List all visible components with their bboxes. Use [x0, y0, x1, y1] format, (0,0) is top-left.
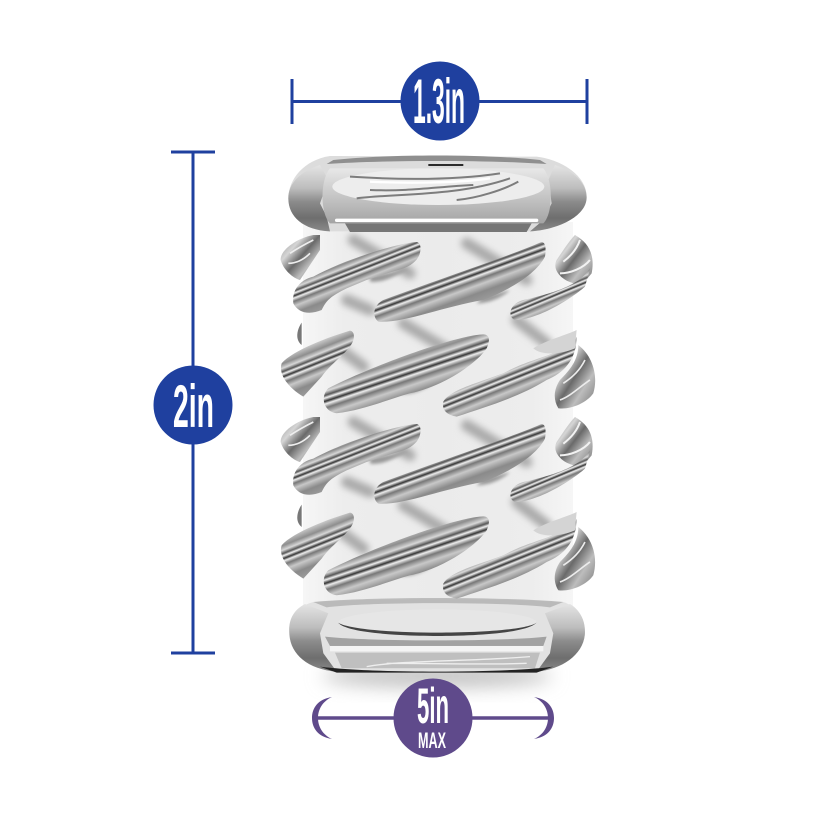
sleeve body	[303, 222, 573, 607]
top ring	[288, 155, 587, 232]
dimension: stretch 5in max	[312, 678, 554, 758]
floor shadow	[322, 664, 552, 688]
spiral ribs upper	[281, 235, 595, 417]
dimension: width 1.3in: 1.3in	[413, 67, 465, 137]
back rib shadows	[337, 240, 547, 549]
dimension: height 2in	[154, 152, 232, 653]
dimension: width 1.3in	[292, 62, 587, 140]
dimension: stretch 5in max: 5in	[417, 678, 449, 734]
dimension: stretch 5in max: MAX	[418, 728, 446, 753]
dimension: height 2in: 2in	[173, 373, 214, 440]
bottom ring	[289, 598, 585, 673]
spiral ribs lower	[281, 417, 595, 599]
product: ribbed clear sleeve	[281, 155, 595, 673]
